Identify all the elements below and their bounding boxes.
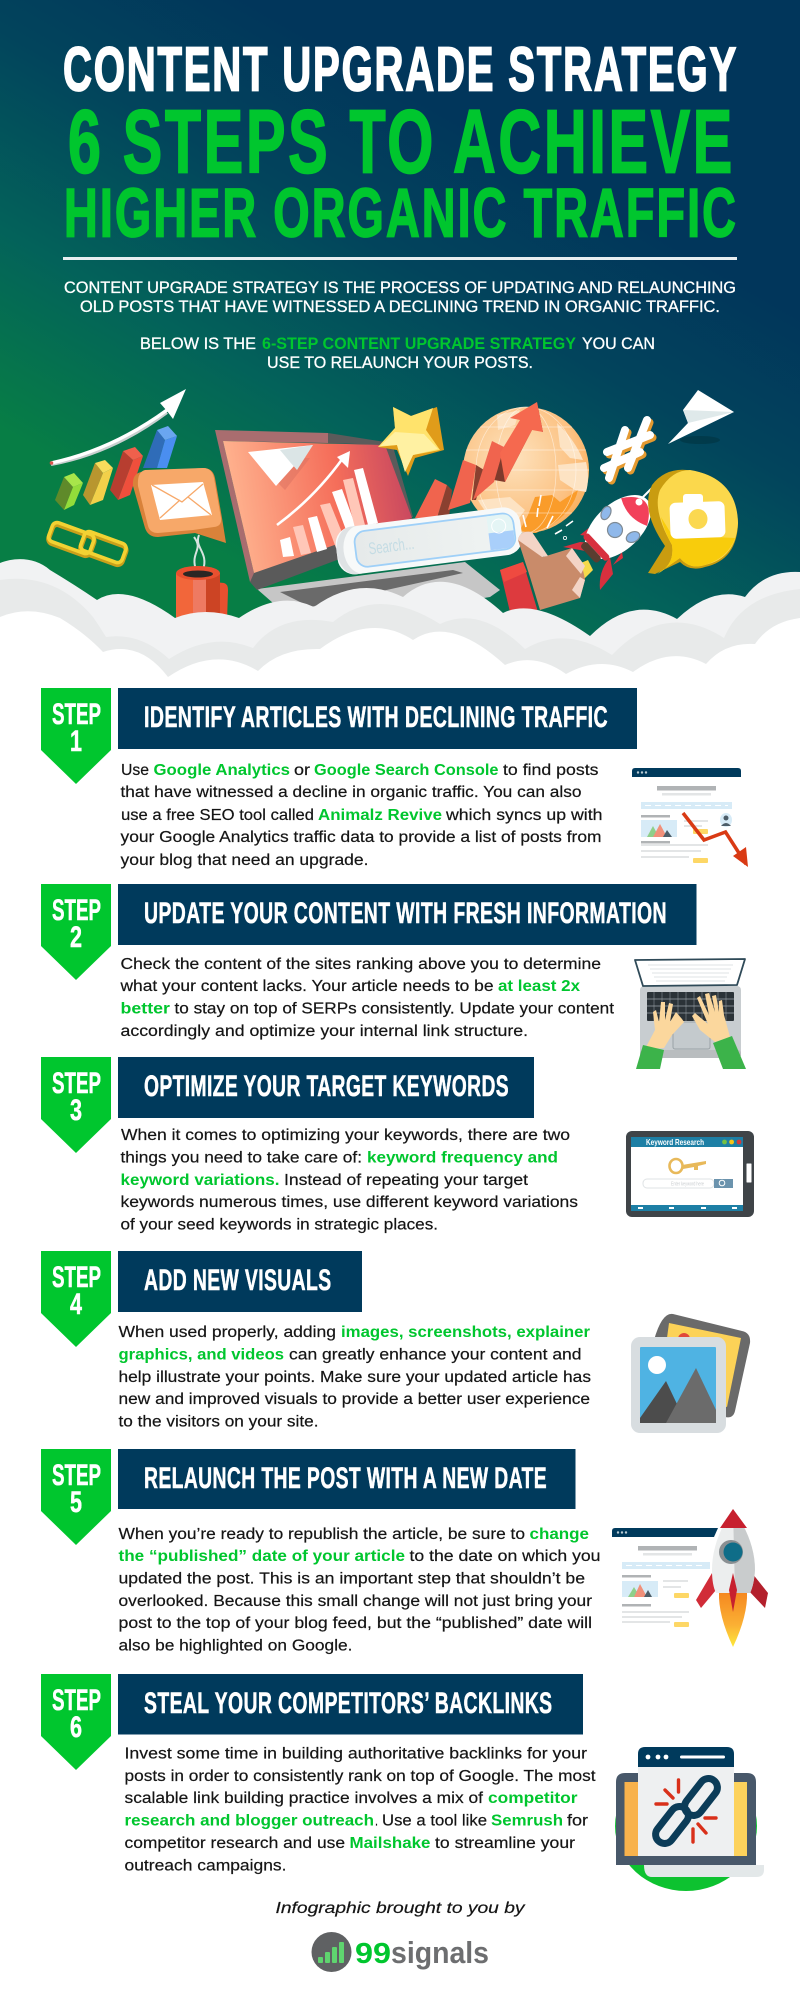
step 6 text: Use a tool like (382, 1812, 487, 1830)
icon: coffee mug (176, 535, 228, 622)
step 5 badge: STEP (52, 1459, 101, 1492)
step 2 text (119, 956, 615, 1040)
step 3 badge (41, 1057, 111, 1153)
icon: hashtag (604, 420, 652, 480)
step 6 text: for (567, 1812, 588, 1830)
icon: search bar: Search... (367, 534, 415, 558)
step 6 text: scalable link building practice involves a mix of (124, 1790, 484, 1807)
footer credit (276, 1900, 526, 1972)
step 5 text: to the date on which you (410, 1548, 600, 1565)
intro text: BELOW IS THE (140, 335, 256, 353)
step 1 text: to find posts (503, 762, 599, 779)
icon: webpage with declining arrow (632, 768, 748, 867)
step 6 text: research and blogger outreach (124, 1812, 374, 1830)
step 6 badge (41, 1674, 111, 1770)
step 6 text (124, 1746, 596, 1874)
step 6 heading (118, 1674, 583, 1734)
logo: 99signals: 99 (355, 1938, 391, 1970)
step 6 badge: 6 (70, 1711, 82, 1744)
step 4 badge: 4 (70, 1288, 82, 1321)
step 3 text: of your seed keywords in strategic places. (120, 1216, 438, 1234)
step 3 text: keyword frequency and (367, 1150, 558, 1166)
step 3 text: things you need to take care of: (120, 1150, 362, 1166)
icon: webpage with rocket (612, 1509, 768, 1647)
step 1 badge: 1 (70, 725, 82, 758)
step 5 text: post to the top of your blog feed, but the “published” date will (118, 1615, 592, 1632)
hero illustration (0, 389, 800, 700)
step 6 text: to streamline your (435, 1835, 575, 1852)
icon: rising white arrow (50, 389, 186, 465)
icon: search bar (334, 505, 524, 576)
step 5 text: the “published” date of your article (118, 1548, 405, 1565)
step 6 text: competitor (488, 1790, 578, 1807)
icon: globe (463, 407, 589, 540)
intro text: YOU CAN (582, 335, 655, 353)
step 1 text: your blog that need an upgrade. (120, 852, 368, 869)
step 4 text: images, screenshots, explainer (341, 1324, 590, 1341)
rocket (696, 1509, 768, 1647)
step 5 text: updated the post. This is an important step that shouldn’t be (118, 1570, 585, 1588)
icon: pointing hand (500, 532, 585, 612)
step 5 text: overlooked. Because this small change will not just bring your (118, 1593, 592, 1610)
step 4 text: graphics, and videos (118, 1346, 284, 1364)
step 4 text: to the visitors on your site. (118, 1414, 318, 1430)
step 6 text: posts in order to consistently rank on top of Google. The most (124, 1768, 596, 1785)
step 6 badge: STEP (52, 1684, 101, 1717)
step 6 text: Mailshake (350, 1835, 431, 1852)
icon: rocket (563, 483, 663, 590)
step 2 badge: 2 (70, 921, 82, 954)
step 5 badge (41, 1449, 111, 1545)
icon: laptop (215, 430, 500, 628)
intro text: 6-STEP CONTENT UPGRADE STRATEGY (262, 335, 576, 353)
icon: tablet keyword research: Enter keyword here (671, 1182, 704, 1188)
panel: step 6 (41, 1674, 764, 1891)
step 3 text: keyword variations. (120, 1172, 280, 1189)
step 5 heading (118, 1449, 576, 1509)
icon: stacked images (631, 1314, 750, 1433)
step 3 text: When it comes to optimizing your keywords, there are two (121, 1127, 570, 1144)
background gradient (0, 0, 800, 700)
icon: chain link (47, 521, 127, 566)
step 3 badge: 3 (70, 1094, 82, 1127)
intro text: CONTENT UPGRADE STRATEGY IS THE PROCESS OF UPDATING AND RELAUNCHING (64, 279, 736, 297)
chart on laptop screen (277, 451, 378, 557)
step 3 heading: OPTIMIZE YOUR TARGET KEYWORDS (144, 1070, 509, 1103)
step 1 text: Use (121, 762, 149, 779)
step 2 text: better (120, 1000, 170, 1018)
step 6 text: Invest some time in building authoritative backlinks for your (124, 1746, 587, 1762)
step 4 text (118, 1324, 591, 1430)
logo: 99signals: signals (391, 1935, 489, 1970)
step 1 text: your Google Analytics traffic data to provide a list of posts from (120, 829, 602, 846)
step 5 text (118, 1526, 600, 1654)
step 4 badge (41, 1251, 111, 1347)
intro text (64, 279, 736, 372)
title (63, 36, 738, 252)
logo: 99signals (312, 1932, 489, 1972)
panel: step 4 (41, 1251, 750, 1433)
step 6 heading: STEAL YOUR COMPETITORS’ BACKLINKS (144, 1687, 552, 1720)
icon: 3D bar chart (55, 426, 177, 510)
footer credit: Infographic brought to you by (276, 1900, 526, 1917)
step 1 text: Google Search Console (314, 762, 499, 779)
step 4 badge: STEP (52, 1261, 101, 1294)
icon: email bubble (133, 468, 226, 543)
step 4 text: When used properly, adding (118, 1324, 336, 1341)
panel: step 3 (41, 1057, 754, 1234)
step 6 text: competitor research and use (124, 1835, 345, 1852)
step 4 heading (118, 1251, 362, 1312)
panel: step 1 (41, 688, 748, 869)
icon: red zigzag arrow (415, 402, 543, 518)
step 5 text: When you’re ready to republish the article, be sure to (118, 1526, 525, 1543)
step 3 badge: STEP (52, 1067, 101, 1100)
intro text: OLD POSTS THAT HAVE WITNESSED A DECLINING TREND IN ORGANIC TRAFFIC. (80, 298, 720, 316)
step 2 text: what your content lacks. Your article needs to be (119, 978, 494, 995)
step 1 heading (118, 688, 637, 749)
step 1 text: or (294, 762, 310, 779)
step 5 badge: 5 (70, 1486, 82, 1519)
step 2 text: at least 2x (498, 978, 580, 995)
step 2 badge: STEP (52, 894, 101, 927)
icon: paper plane (668, 390, 734, 444)
key (670, 1159, 706, 1173)
step 5 text: change (530, 1526, 589, 1543)
icon: broken link on laptop (615, 1747, 764, 1891)
step 2 text: to stay on top of SERPs consistently. Update your content (174, 1000, 615, 1018)
step 1 text: that have witnessed a decline in organic traffic. You can also (120, 784, 582, 801)
step 5 text: also be highlighted on Google. (118, 1638, 352, 1654)
intro text: USE TO RELAUNCH YOUR POSTS. (267, 354, 533, 372)
step 2 text: accordingly and optimize your internal link structure. (120, 1023, 528, 1040)
panel: step 2 (41, 884, 746, 1069)
step 3 text: Instead of repeating your target (284, 1172, 529, 1189)
step 3 text (120, 1127, 578, 1234)
step 1 text: which syncs up with (445, 807, 602, 824)
step 2 heading (118, 884, 696, 945)
icon: tablet keyword research (626, 1131, 754, 1217)
step 4 heading: ADD NEW VISUALS (144, 1264, 332, 1297)
panel: step 5 (41, 1449, 768, 1654)
step 2 badge (41, 884, 111, 980)
step 1 text: use a free SEO tool called (121, 807, 314, 824)
step 1 text: Google Analytics (154, 762, 290, 779)
step 4 text: new and improved visuals to provide a better user experience (118, 1391, 590, 1408)
step 3 text: keywords numerous times, use different keyword variations (120, 1194, 578, 1211)
step 5 heading: RELAUNCH THE POST WITH A NEW DATE (144, 1462, 547, 1495)
step 1 text: Animalz Revive (318, 807, 442, 824)
icon: paper plane on screen (248, 445, 313, 490)
icon: tablet keyword research: Keyword Research (646, 1138, 704, 1147)
step 1 badge (41, 688, 111, 784)
icon: star (378, 407, 444, 476)
step 2 text: Check the content of the sites ranking above you to determine (120, 956, 601, 973)
step 4 text: help illustrate your points. Make sure your updated article has (118, 1369, 591, 1386)
step 6 text: Semrush (491, 1812, 563, 1830)
step 1 text (120, 762, 602, 869)
step 6 text: outreach campaigns. (124, 1858, 286, 1874)
icon: camera chat bubble (648, 470, 738, 574)
icon: laptop with typing hands (635, 959, 746, 1069)
step 3 heading (118, 1057, 534, 1118)
clouds (0, 559, 800, 700)
step 4 text: can greatly enhance your content and (289, 1346, 582, 1364)
step 1 badge: STEP (52, 698, 101, 731)
step 6 text: . (375, 1812, 378, 1830)
